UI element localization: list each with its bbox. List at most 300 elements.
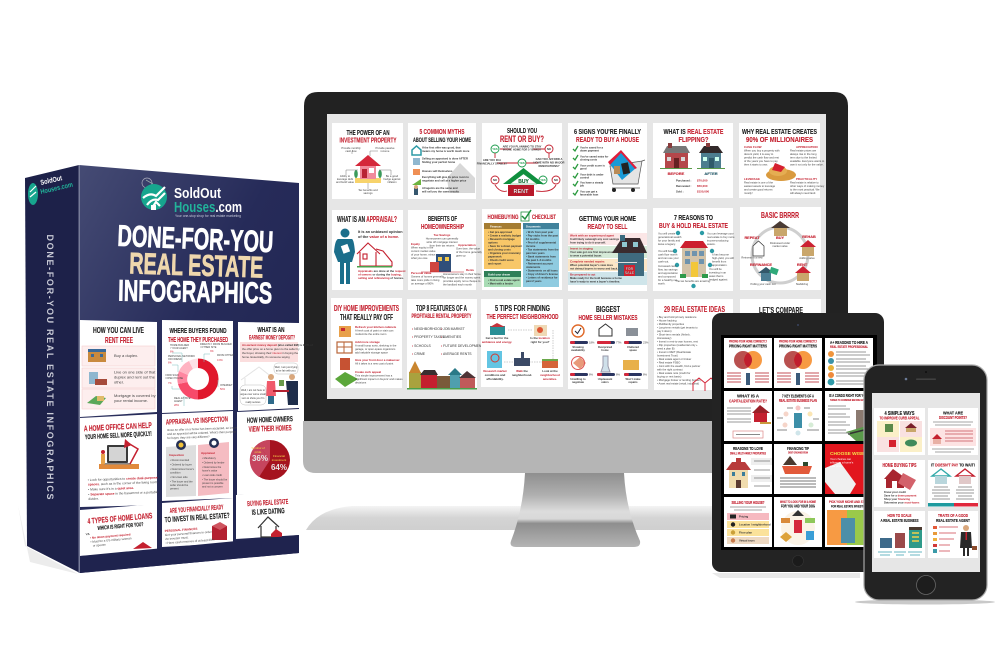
benefit text: from their tax returns: [430, 244, 455, 248]
card: capitalization rate: [724, 391, 772, 441]
labels: and build value: [336, 180, 355, 184]
heading: RENT FREE: [105, 335, 133, 345]
cycle labels: BUY: [776, 236, 784, 240]
speech bubbles: Well, I am not here to: [241, 389, 265, 392]
documents panel: • Proof of supplemental: [526, 240, 556, 244]
card: what is real estate flipping: [653, 123, 733, 198]
tip text: hasn't ready to meet a buyer's timeline.: [570, 280, 620, 284]
card: should you rent or buy: FINANCIALLY STABLE?: [477, 162, 508, 166]
tips: • Make sure it's in a quiet area.: [88, 486, 134, 492]
documents panel: • Copy of driver's license: [526, 272, 558, 276]
card: should you rent or buy: CAN YOU AFFORD A: [536, 157, 562, 161]
heading: BUY & HOLD REAL ESTATE: [659, 221, 728, 230]
myth text: finding your perfect home: [422, 160, 456, 164]
labels: cash flow: [345, 149, 357, 153]
reason text: income-producing: [707, 238, 729, 242]
caption lines: [878, 552, 922, 555]
heading: SMALL MULTI-FAMILY PROPERTIES: [730, 452, 766, 456]
heading: FINANCING TIP: [787, 446, 809, 452]
heading: [659, 213, 728, 230]
improvement text: add valuable storage space: [355, 350, 388, 354]
benefit text: When equity in the: [411, 246, 434, 250]
card: financing tip: [774, 444, 822, 494]
house corner: [133, 542, 152, 549]
speech bubbles: sum to show you I'm: [242, 397, 264, 400]
feature list: • PROPERTY TAXES: [412, 335, 445, 339]
chart labels: / OPEN HOUSE: [165, 377, 183, 380]
finances panel: Finances: [490, 224, 502, 228]
cycle labels: Stabilizing: [796, 282, 809, 286]
checklist: control: [580, 176, 589, 180]
tip text: Walk the: [516, 369, 528, 373]
heading: [880, 411, 920, 420]
pie chart: 36%: [252, 454, 268, 463]
brick cube: [212, 522, 227, 540]
card: getting your home ready to sell: [568, 209, 647, 291]
reason text: It has become: [712, 252, 729, 256]
house: [726, 458, 751, 488]
cost table: Sold :: [676, 190, 684, 194]
heading: HOMEBUYING: [488, 214, 518, 221]
idea list: pay it down): [657, 329, 672, 333]
three buildings: [880, 527, 922, 548]
appraisal panel: • Loan side credit: [202, 473, 222, 477]
improvement text: [355, 325, 403, 384]
reason text: benefit from: [712, 260, 727, 264]
definition panel: An earnest money deposit (also called EM) is 1-2% of: [242, 343, 313, 347]
heading: WHAT ARE: [943, 410, 964, 416]
finance text: Get your personal finances in order: [165, 530, 212, 537]
caption: [830, 457, 854, 468]
idea list: buying or rent basis): [657, 374, 681, 378]
tablet screen: [721, 335, 877, 550]
heading: A REAL ESTATE BUSINESS: [880, 518, 919, 524]
monitor bezel: [304, 92, 848, 421]
card: selling your house: [724, 497, 772, 547]
card: should you rent or buy: ARE YOU IN A: [483, 158, 501, 162]
heading: HOME BUYING TIPS: [882, 463, 917, 469]
card: the power of an investment property: [332, 123, 403, 199]
checklist: Your credit score is: [580, 164, 605, 168]
card: appraisal vs inspection: [162, 411, 243, 501]
myth text: Selling an appraised is done AFTER: [422, 156, 468, 160]
benefit text: CASH FLOW: [744, 145, 762, 149]
heading: [936, 513, 970, 524]
chart labels: INTERNET: [220, 384, 233, 387]
checklist: Your debt is under: [580, 172, 604, 176]
home button: [792, 556, 804, 566]
idea list: • Mortgage broker or lending (lender): [657, 378, 701, 382]
inspection panel: present: [170, 486, 179, 490]
heading: THAT REALLY PAY OFF: [340, 313, 393, 322]
definition panel: the buyer, showing their interest in buying the: [242, 351, 299, 355]
benefit text: write off mortgage interest: [426, 240, 458, 244]
card: should you rent or buy: YES: [519, 161, 525, 165]
chart labels: PERSONAL NETWORK: [168, 355, 195, 358]
tip text: Your sale got one first impression: [570, 250, 614, 254]
tip text: Get a feel for the: [486, 336, 509, 340]
heading: 6 SIGNS YOU'RE FINALLY: [574, 127, 641, 136]
heading: [247, 497, 289, 517]
heading: PRICING YOUR HOME CORRECTLY: [779, 340, 818, 344]
benefit text: Equity: [411, 242, 420, 246]
checklist: closing costs: [580, 158, 598, 162]
benefit text: Real estate is one of the: [744, 180, 773, 184]
tip text: Is the location: [530, 336, 550, 340]
mistake labels: Won't make: [626, 377, 641, 381]
mistake labels: 23%: [643, 340, 649, 344]
pie chart: investment: [272, 458, 286, 462]
heading: [830, 340, 869, 349]
heading: IS A CONDO RIGHT FOR YOU?: [829, 393, 869, 399]
card: earnest money deposit: [238, 322, 313, 411]
heading: READY TO SELL: [588, 222, 628, 231]
card: how home owners view their homes: [237, 409, 299, 495]
heading: DIY HOME IMPROVEMENTS: [334, 304, 399, 313]
feature list: • FUTURE DEVELOPMENT: [441, 344, 483, 348]
mistake bars: [570, 341, 642, 376]
chart labels: 28%: [174, 404, 180, 407]
reason text: [658, 232, 735, 286]
improvement text: Create curb appeal: [355, 370, 381, 374]
improvement text: modernize the entire room: [355, 332, 387, 336]
myth text: negotiate and sell at a higher price: [422, 178, 467, 182]
heading: [413, 127, 471, 144]
heading: [488, 210, 557, 221]
benefit text: provides equity not a cheque to: [443, 279, 481, 283]
heading: DEBT ORGANIZATION: [788, 450, 808, 454]
heading: REAL ESTATE PROFESSIONAL: [830, 345, 869, 349]
idea list: • Real estate FSBO: [657, 360, 680, 364]
tip text: ambiance and energy.: [482, 340, 512, 344]
appraisal note: selling and refinancing of homes.: [358, 276, 404, 280]
card: diy home improvements: [331, 298, 403, 388]
chart labels: 6%: [170, 350, 174, 354]
heading: [664, 127, 724, 144]
tip text: neighborhood.: [512, 373, 532, 377]
definition: [358, 230, 403, 239]
finance text: An investor must:: [165, 535, 189, 541]
documents panel: [523, 223, 559, 287]
benefit text: LEVERAGE: [744, 177, 760, 181]
heading: PRICING YOUR HOME CORRECTLY: [729, 340, 768, 344]
benefit text: mostly!: [744, 191, 753, 195]
loan text: or spouse: [93, 542, 106, 548]
heading: CHECKLIST: [532, 214, 557, 221]
cycle labels: Distressed under: [770, 241, 790, 245]
feature list: • AVERAGE RENTS: [441, 352, 472, 356]
row of houses: [407, 361, 477, 390]
step text: your rental income.: [114, 398, 148, 403]
spine logo: SoldOut: [40, 175, 63, 187]
documents panel: past 2 years: [526, 279, 542, 283]
mistake labels: negotiate: [572, 380, 584, 384]
heading: WHAT IS AN: [258, 325, 284, 334]
benefit text: of the home generally: [456, 250, 483, 254]
heading: WHAT IS A: [737, 394, 759, 400]
tablet body: [712, 313, 884, 572]
heading: CAPITALIZATION RATE?: [729, 398, 767, 404]
finances panel: • Check credit score: [488, 258, 514, 262]
definition: of the value of a home.: [358, 235, 399, 239]
benefit text: Tax Savings: [434, 233, 451, 237]
intro: and an appraisal will be ordered. What's their purpose: [167, 430, 237, 436]
improvement text: This simple improvement has a: [355, 374, 393, 378]
heading: THE POWER OF AN: [346, 128, 390, 137]
labels: Provide passive: [376, 146, 395, 150]
reason text: appreciation.: [712, 263, 728, 267]
appraisal panel: [198, 438, 229, 496]
labels: hedge against: [384, 177, 401, 181]
reason text: cash flow month: [658, 252, 678, 256]
idea list: • Asset real estate (retail, industrial): [657, 382, 699, 386]
card: pricing right matters 2: [774, 338, 822, 388]
documents panel: 12 months: [526, 237, 540, 241]
appraisal note: Appraisals are done at the request: [358, 269, 405, 273]
tip text: It will likely outweigh any cost savings: [570, 237, 620, 241]
definition panel: home. Essentially, it's someone saying: [242, 355, 290, 359]
checklist: good: [580, 166, 587, 170]
inspection panel: Inspection: [169, 453, 184, 457]
feature list: • SCHOOLS: [412, 344, 431, 348]
idea list: • Flip properties (residential only +: [657, 343, 698, 347]
heading: A+ REASONS TO HIRE A: [830, 340, 868, 346]
card: 4 types of home loans: [80, 504, 157, 556]
benefit text: [411, 233, 483, 286]
labels: leverage debt: [337, 177, 353, 181]
heading: HOW YOU CAN LIVE: [93, 326, 144, 335]
feature list: • JOB MARKET: [441, 327, 465, 331]
idea list: Homeaway): [657, 336, 671, 340]
heading: 4 SIMPLE WAYS: [884, 411, 915, 417]
card: traits of a good agent: [928, 511, 978, 558]
definition panel: the offer price on a home given to the seller by: [242, 347, 300, 351]
house: [752, 405, 771, 424]
chart labels: HOME BUILDER: [170, 344, 189, 347]
benefit text: Real estate is relative to: [790, 180, 819, 184]
main title: [117, 220, 274, 310]
reason text: worth.: [658, 282, 666, 286]
documents panel: the past 1-3 months: [526, 258, 552, 262]
heading: EARNEST MONEY DEPOSIT?: [249, 334, 295, 342]
card: should you rent or buy: RENOVATIONS?: [539, 164, 560, 168]
reason text: high-yield, you will: [712, 256, 734, 260]
option rows: Pricing: [739, 514, 748, 518]
house illustration: [354, 155, 382, 183]
house outline: [241, 367, 273, 404]
heading: 5 COMMON MYTHS: [420, 127, 464, 136]
home button: [916, 576, 936, 594]
heading: PROFITABLE RENTAL PROPERTY: [412, 313, 472, 320]
appraisal panel: • Ordered by lender: [202, 460, 225, 464]
idea list: • Joint with the wealth, find a partner: [657, 364, 700, 368]
reason lines: [836, 352, 870, 384]
buy house and rent sign: RENT: [514, 189, 529, 195]
card: how you can live rent free: [80, 320, 157, 417]
chart labels: 7%: [168, 382, 172, 385]
heading: [164, 504, 230, 524]
documents panel: income: [526, 244, 536, 248]
card: pricing right matters 1: [724, 338, 772, 388]
idea list: • Buy and hold primary residence: [657, 315, 697, 319]
finances panel: options: [488, 240, 498, 244]
card: home and dog: [774, 497, 822, 547]
checklist: You can get a: [580, 190, 598, 194]
tip text: from trying to do it yourself.: [570, 240, 606, 244]
benefit text: predict the cash flow and rest: [744, 156, 779, 160]
myth text: [421, 146, 470, 194]
heading: PRICING RIGHT MATTERS: [729, 344, 768, 350]
heading: TO INVEST IN REAL ESTATE?: [164, 511, 230, 524]
heading: [93, 326, 144, 345]
dream panel: • Find a real estate agent: [488, 278, 520, 282]
heading: TOP 8 FEATURES OF A: [416, 304, 467, 313]
card: pick your niche: [825, 497, 873, 547]
reason text: leave a legacy.: [658, 242, 676, 246]
reason text: asset that is: [709, 274, 724, 278]
icons: [412, 146, 421, 195]
card: 5 tips for finding: [481, 299, 563, 387]
heading: TO IMPROVE CURB APPEAL: [880, 416, 920, 420]
mistake labels: 8%: [589, 372, 593, 376]
checklist: down payment: [580, 148, 599, 152]
cost table: Renovated :: [676, 184, 691, 188]
card: should you rent or buy: ARE YOU PLANNING TO STAY: [503, 144, 542, 148]
tip text: Work with an experienced agent: [570, 234, 614, 238]
tip icons: [487, 323, 558, 368]
myth text: Everything will give its price room to: [422, 175, 469, 179]
venn diagram: [784, 351, 812, 369]
benefit text: Rents: [466, 268, 474, 272]
idea list: • Invest in rent-to-own homes, rent: [657, 340, 698, 344]
monitor: [303, 92, 848, 547]
heading: IS LIKE DATING: [251, 506, 285, 517]
heading: THE PERFECT NEIGHBORHOOD: [486, 312, 558, 321]
card: are you financially ready: [162, 498, 233, 547]
reason text: assets.: [707, 242, 716, 246]
benefit text: decent yield, it is easy to: [744, 152, 774, 156]
definition lines: [727, 408, 751, 422]
main title: INFOGRAPHICS: [118, 275, 272, 310]
heading: BIGGEST: [596, 305, 620, 314]
card: should you rent or buy: NO: [547, 147, 551, 151]
tip bands: [568, 233, 647, 285]
card: doesn't pay to wait: [928, 460, 978, 507]
improvement text: decisions: [355, 380, 367, 384]
finances panel: • Research mortgage: [488, 237, 515, 241]
heading: TRAITS OF A GOOD: [938, 513, 968, 518]
benefit text: Owners of homes generally: [411, 274, 444, 278]
chart labels: DIRECTLY FROM BUILDER: [200, 343, 232, 346]
idea list: • Real estate note (credit for: [657, 371, 690, 375]
reason text: for a healthy net: [658, 278, 678, 282]
heading: THINGS TO CONSIDER BEFORE BUYING: [830, 398, 868, 402]
phone: [864, 365, 987, 600]
cycle labels: market value: [772, 244, 788, 248]
card: basic brrrr: [740, 207, 821, 290]
tips: spaces, such as in the corner of the living room.: [88, 480, 159, 487]
house icons: [693, 378, 716, 391]
reason text: for your family and: [658, 238, 681, 242]
inspection panel: • Non-loan side: [170, 475, 188, 479]
appraisal panel: and not a concern: [202, 484, 223, 488]
house before: [660, 143, 692, 169]
card: discount points: [928, 408, 978, 455]
mistake icons: [572, 324, 639, 372]
myth text: If the first offer was good, that: [422, 146, 461, 150]
step icons: [87, 349, 107, 405]
benefit text: current market value: [411, 249, 436, 253]
finances panel: • Create a realistic budget: [488, 234, 521, 238]
labels: [336, 146, 401, 195]
before after labels: [668, 171, 718, 176]
tips lines: Save for a down payment: [884, 494, 917, 498]
main title: REAL ESTATE: [129, 247, 264, 285]
phone shadow: [855, 600, 995, 604]
box bottom band: [80, 535, 299, 573]
feature list: • AMENITIES: [441, 335, 462, 339]
improvement icons: [335, 326, 358, 387]
heading: ARE YOU FINANCIALLY READY: [169, 504, 224, 515]
heading: BUYING REAL ESTATE: [247, 497, 289, 508]
heading: 4 TYPES OF HOME LOANS: [87, 511, 153, 526]
mistake labels: space: [629, 349, 637, 352]
benefit text: and create good returns: [744, 188, 773, 192]
heading: HOW HOME OWNERS: [247, 414, 293, 425]
heading: [87, 511, 154, 533]
tip text: Make ready for the bold because a home: [570, 276, 622, 280]
cycle labels: [741, 235, 816, 286]
finance text: • Have cash reserves of at least 20%: [165, 538, 215, 545]
pie chart: [250, 440, 290, 480]
center building: [782, 406, 814, 436]
benefit text: goes up: [456, 254, 466, 258]
reason text: Increased cash: [658, 264, 677, 268]
main title: DONE-FOR-YOU: [117, 220, 274, 259]
card: curb appeal: [874, 408, 925, 455]
cycle labels: REFINANCE: [750, 263, 773, 267]
card: biggest home seller mistakes: [568, 299, 649, 389]
heading: WHAT IS REAL ESTATE: [664, 127, 724, 136]
feature list: • NEIGHBORHOOD: [412, 327, 443, 331]
house after: [697, 143, 725, 169]
heading: THE HOME THEY PURCHASED: [168, 335, 228, 344]
finances panel: and closing costs: [488, 248, 511, 252]
heading: [729, 394, 767, 404]
finances panel: [484, 223, 522, 269]
caption: sale price.: [830, 464, 843, 468]
improvement text: garage, or open-space organizers: [355, 347, 396, 351]
card: why real estate creates millionaires: [739, 123, 825, 198]
idea list: need a plan B): [657, 346, 675, 350]
house with sale sign: FOR: [626, 267, 634, 271]
speech bubbles: [240, 363, 298, 405]
heading: [486, 304, 558, 321]
option rows: Floor plan: [739, 530, 752, 534]
logo: Your one-stop shop for real estate marketing: [175, 214, 241, 218]
inspection panel: • Ordered by buyer: [170, 462, 192, 466]
tip text: When potential buyer's view does: [570, 263, 614, 267]
agent: [960, 525, 977, 556]
feature list: • CRIME: [412, 352, 426, 356]
body lines: [780, 478, 816, 487]
loan text: • No down payment required: [90, 532, 131, 540]
myth text: Houses sell themselves: [422, 169, 453, 173]
documents panel: past two years: [526, 251, 545, 255]
reason text: and can use your: [658, 256, 679, 260]
improvement text: A small bump sorts, shelving in the: [355, 344, 397, 348]
heading: [500, 126, 544, 145]
